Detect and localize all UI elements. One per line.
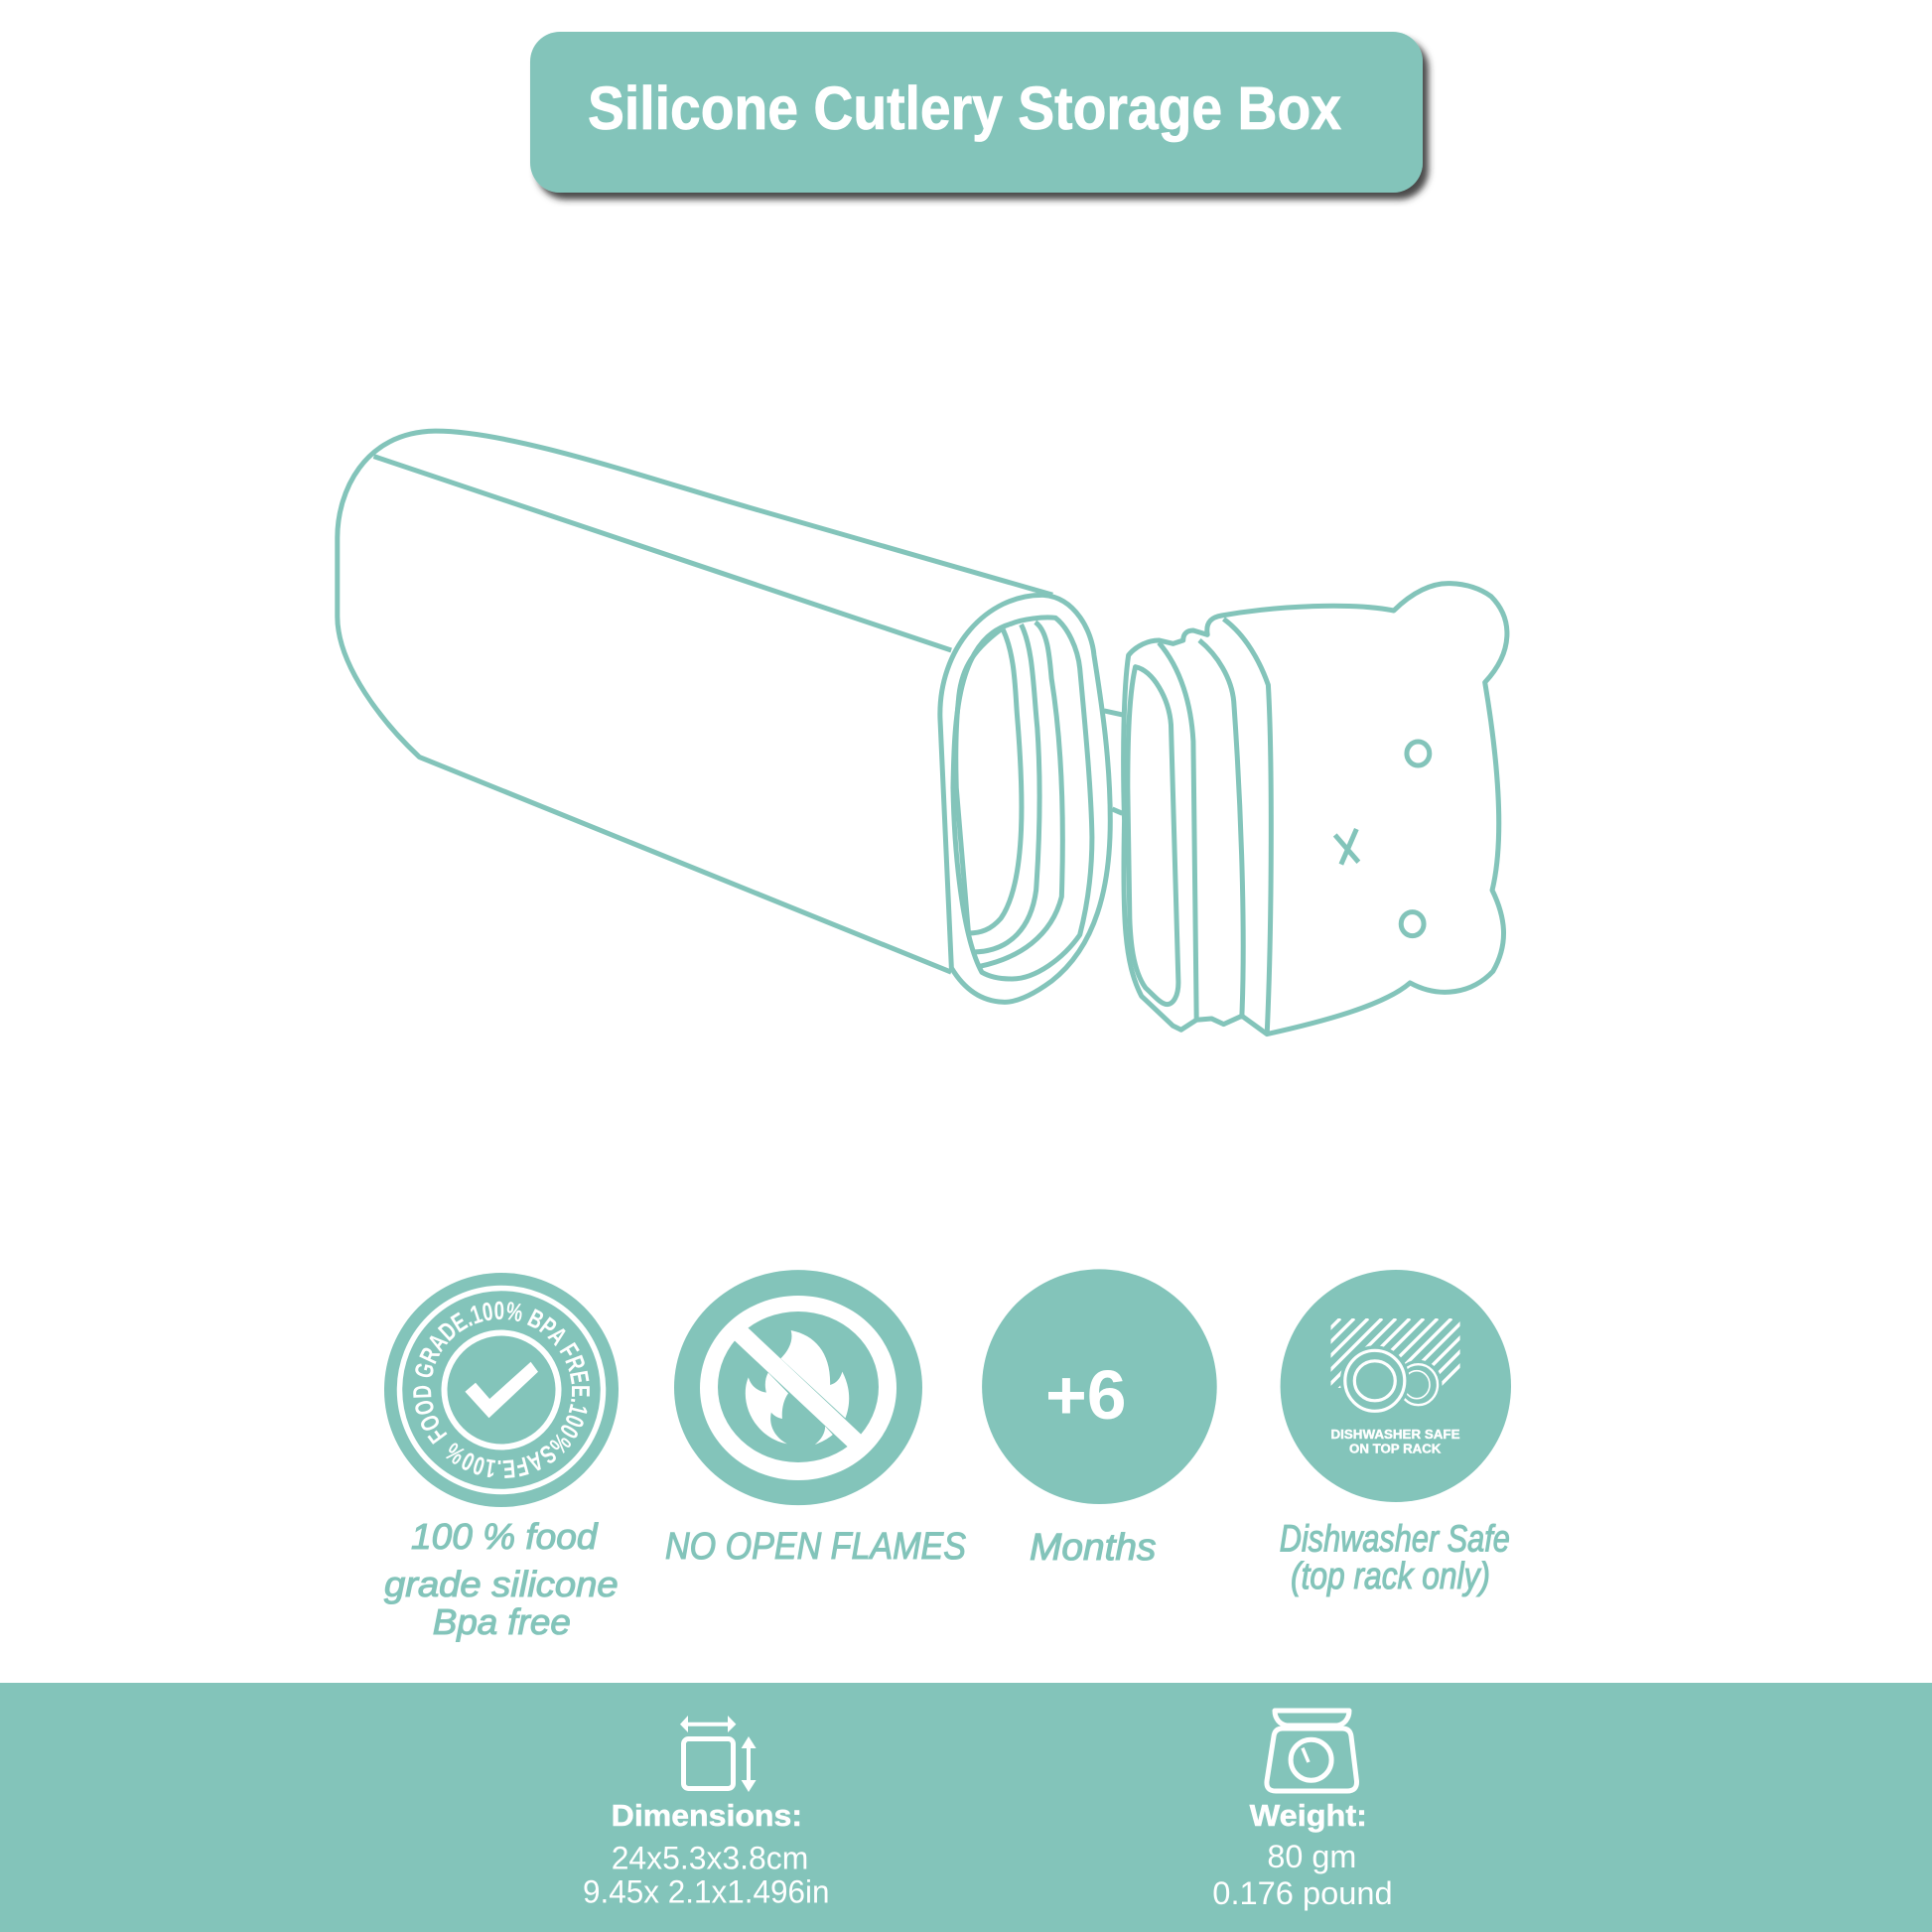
- label: 100% food grade silicone: Bpa free: [433, 1601, 571, 1642]
- weight text: 80 gm: [1267, 1839, 1356, 1874]
- title banner: Silicone Cutlery Storage Box: [588, 74, 1341, 142]
- weight text: Weight:: [1250, 1798, 1367, 1833]
- label: 100% food grade silicone: 100 % food: [411, 1516, 598, 1557]
- badge: dishwasher safe: DISHWASHER SAFE: [1330, 1428, 1459, 1442]
- title banner: [530, 32, 1423, 193]
- icon: weighing scale: [1267, 1711, 1357, 1791]
- badge: dishwasher safe: ON TOP RACK: [1349, 1442, 1441, 1455]
- badge: no open flames: [674, 1270, 922, 1505]
- label: 100% food grade silicone: [384, 1516, 619, 1642]
- badge: 100% food grade: [384, 1273, 619, 1507]
- label: dishwasher safe top rack only: [1280, 1519, 1510, 1597]
- badge: dishwasher safe: [1281, 1270, 1511, 1502]
- dimensions text: [583, 1798, 830, 1910]
- weight text: 0.176 pound: [1212, 1875, 1393, 1911]
- product illustration: bear lid: [1104, 584, 1507, 1035]
- label: dishwasher safe top rack only: (top rack only): [1291, 1556, 1490, 1597]
- dimensions text: 9.45x 2.1x1.496in: [583, 1874, 830, 1910]
- label: months: Months: [1030, 1527, 1156, 1569]
- label: no open flames: NO OPEN FLAMES: [665, 1526, 966, 1568]
- badge: +6 months: +6: [1045, 1356, 1127, 1434]
- weight text: [1212, 1798, 1393, 1911]
- dimensions text: 24x5.3x3.8cm: [612, 1841, 808, 1876]
- label: dishwasher safe top rack only: Dishwasher Safe: [1280, 1519, 1510, 1561]
- badge: +6 months: [982, 1269, 1217, 1504]
- product illustration: storage tube: [338, 431, 1110, 1002]
- label: 100% food grade silicone: grade silicone: [384, 1564, 619, 1604]
- footer band: [0, 1683, 1932, 1932]
- badge: 100% food grade: FOOD GRADE.100% BPA FREE.100%SAFE.100%: [413, 1301, 590, 1478]
- dimensions text: Dimensions:: [612, 1798, 802, 1833]
- icon: dimensions: [680, 1716, 757, 1792]
